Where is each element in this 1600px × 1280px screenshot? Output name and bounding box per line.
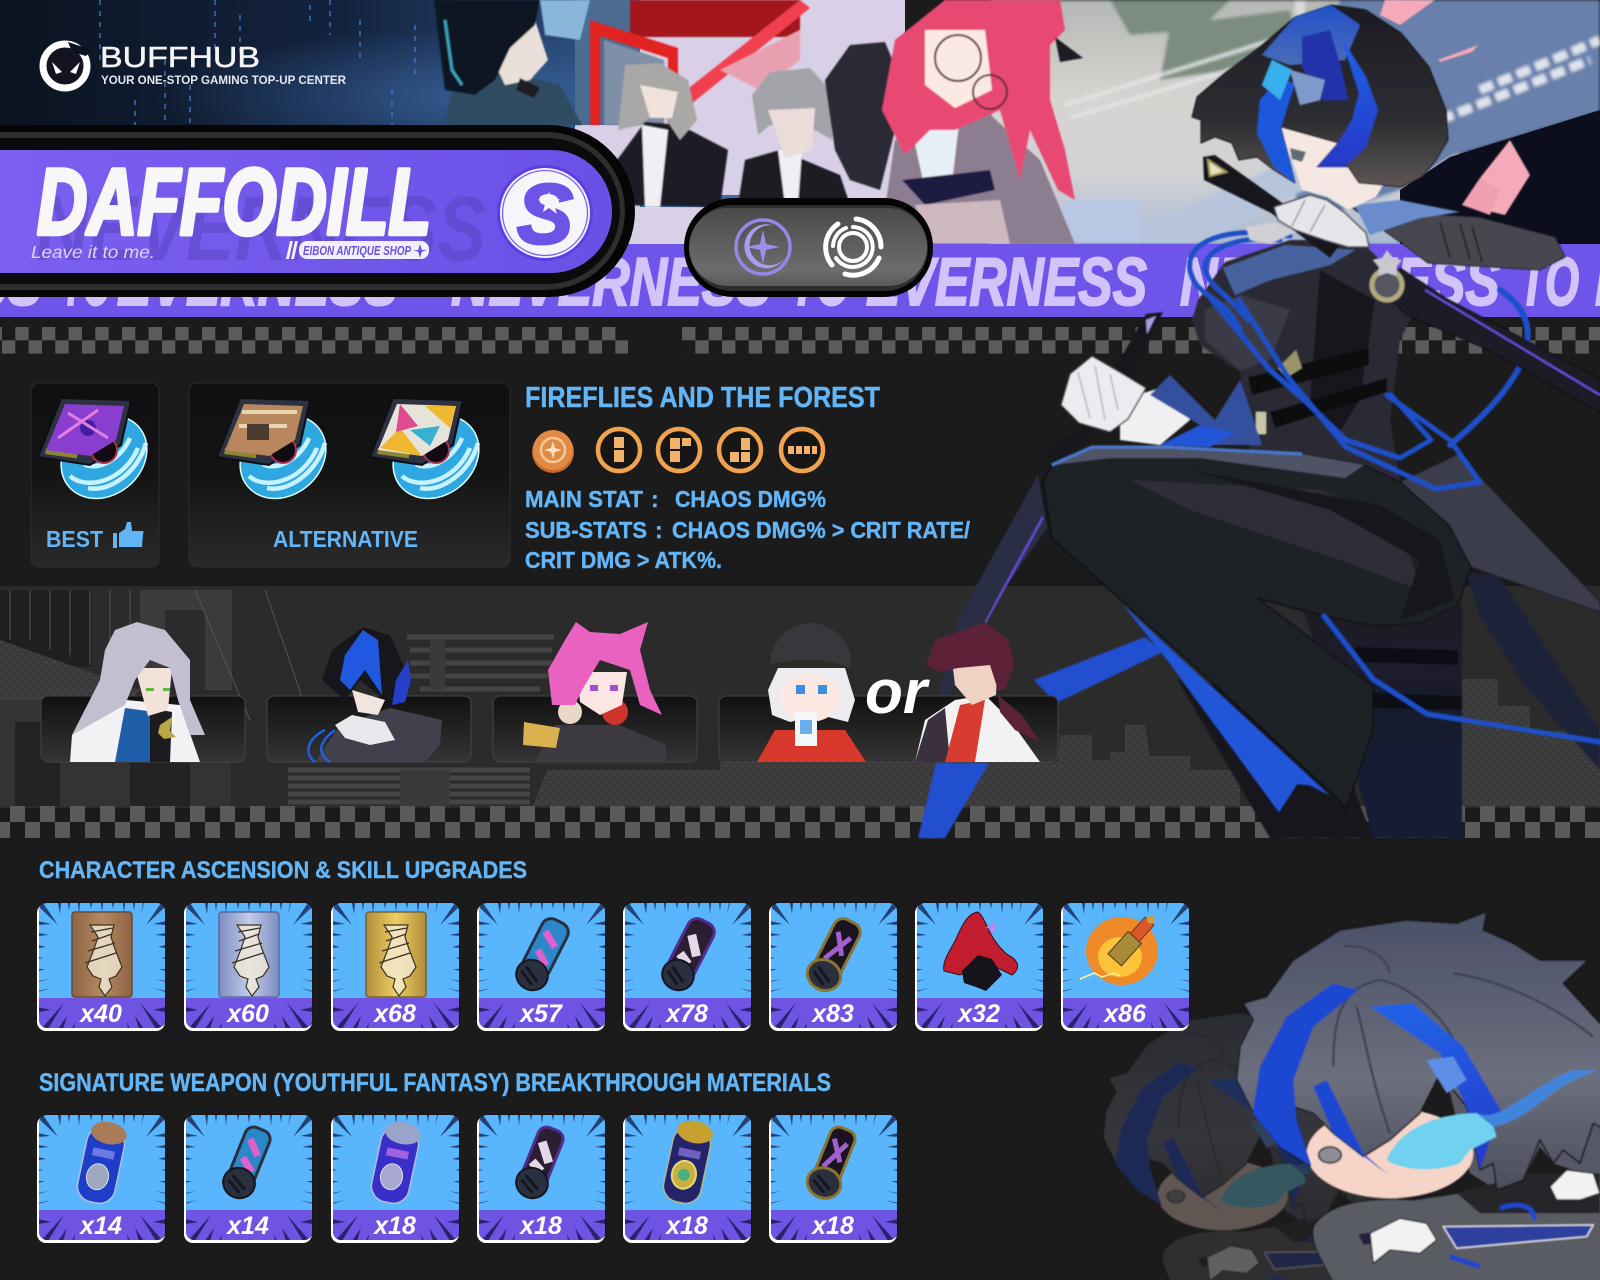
city silhouette — [640, 175, 760, 207]
icon: spark plug — [1080, 911, 1160, 985]
icon: imaginary element — [736, 220, 790, 274]
gloved hand — [1061, 356, 1146, 432]
ghost word: NEVERNESS — [36, 178, 486, 280]
sheath lower — [938, 475, 1047, 696]
scrolling banner strip: EVERNESS — [866, 244, 1147, 320]
panel: team cards — [41, 622, 1058, 762]
boy with dark hair — [434, 0, 590, 125]
chibi ghost echo — [1103, 1007, 1413, 1280]
tile x40: x40 — [78, 1000, 122, 1028]
icon: alternative relic one — [217, 398, 343, 516]
dark lower hem — [1177, 679, 1373, 838]
icon: blue tube — [219, 1123, 276, 1203]
icon: red cape — [944, 912, 1018, 991]
blue ropes — [1190, 232, 1600, 742]
petals — [1380, 0, 1530, 215]
tile x14 tube — [184, 1114, 313, 1243]
dark shaded corner — [1400, 110, 1600, 244]
icon: gold tube — [802, 914, 866, 996]
right coat flap — [1400, 454, 1600, 612]
tile x57 — [477, 902, 606, 1031]
heading: weapon materials: SIGNATURE WEAPON (YOUTHFUL FANTASY) BREAKTHROUGH MATERIALS — [39, 1069, 831, 1097]
white cuff and blue sleeve — [1120, 375, 1262, 447]
sub stats: : — [655, 517, 663, 543]
main stat — [525, 486, 826, 512]
icon: thumbs up — [113, 522, 144, 548]
tile x60: x60 — [225, 1000, 269, 1028]
tile x40 — [37, 902, 166, 1031]
tile x83: x83 — [810, 1000, 854, 1028]
hanging tail — [1467, 574, 1600, 770]
night sky with data rain — [0, 0, 620, 130]
faction tag: EIBON ANTIQUE SHOP — [303, 244, 412, 258]
tile x18 silver capsule — [331, 1114, 460, 1243]
tile x86: x86 — [1102, 1000, 1147, 1028]
icon: silver capsule — [368, 1118, 423, 1206]
sleeve — [1351, 200, 1565, 270]
name title: DAFFODILL — [37, 149, 431, 254]
icon: path symbol — [826, 219, 881, 275]
tile x32: x32 — [956, 1000, 1000, 1028]
tile x60 — [184, 902, 313, 1031]
icon: slot feet — [781, 429, 823, 471]
heading: ascension materials: CHARACTER ASCENSION & SKILL UPGRADES — [39, 857, 527, 884]
tile x18 gold tube — [769, 1114, 898, 1243]
scrolling banner strip: TO — [61, 244, 111, 320]
tile x86 — [1061, 902, 1190, 1031]
icon: silver card — [219, 912, 279, 997]
path emblem — [497, 165, 593, 261]
path emblem: S — [517, 167, 573, 261]
pink haired girl — [825, 0, 1083, 244]
logo icon — [43, 42, 92, 88]
sub stats: SUB-STATS — [525, 517, 647, 543]
icon: gold card — [366, 912, 426, 997]
tile x83 — [769, 902, 898, 1031]
chibi main — [1237, 912, 1600, 1280]
scrolling banner strip: NEVERNESS — [451, 244, 771, 320]
tile x32 — [915, 902, 1044, 1031]
maroon haired man — [915, 622, 1040, 762]
icon: purple tube — [657, 914, 719, 996]
bottom checker strip — [0, 806, 1600, 838]
icon: gold tube — [803, 1123, 861, 1203]
panel: alternative relics — [189, 383, 510, 567]
main character art — [918, 0, 1600, 838]
sub stats — [525, 517, 971, 543]
icon: slot head — [598, 429, 640, 471]
street background — [990, 0, 1600, 245]
top checker strip — [0, 327, 1600, 354]
tile x78: x78 — [664, 1000, 708, 1028]
scrolling banner strip: NEVERNESS — [1180, 244, 1500, 320]
upper gloved hand — [1246, 195, 1369, 247]
or text: or — [865, 658, 930, 727]
character band with city backdrop — [0, 586, 1600, 808]
main stat: MAIN STAT — [525, 486, 643, 512]
hair — [1192, 5, 1448, 187]
quote: Leave it to me. — [31, 242, 155, 262]
torso — [1192, 240, 1420, 482]
icon: set coin — [532, 430, 574, 473]
best label: BEST — [46, 526, 103, 552]
tile x78 — [623, 902, 752, 1031]
lower leg — [1302, 605, 1462, 838]
icon: bronze card — [72, 912, 132, 997]
sword hilt — [1203, 155, 1340, 258]
tile x68: x68 — [372, 1000, 416, 1028]
main stat: CHAOS DMG% — [675, 486, 826, 512]
tile x14 capsule: x14 — [78, 1212, 122, 1240]
crit line: CRIT DMG > ATK%. — [525, 547, 722, 573]
icon: slot body — [719, 429, 761, 471]
logo wordmark: BUFFHUB — [100, 42, 260, 74]
tile x18 silver capsule: x18 — [372, 1212, 416, 1240]
icon: gold capsule — [660, 1117, 715, 1206]
tile x18 purple tube: x18 — [518, 1212, 562, 1240]
blue ribbons — [918, 637, 1163, 838]
alternative label: ALTERNATIVE — [273, 526, 418, 552]
panel: best relic — [31, 383, 164, 567]
silver haired girl — [615, 63, 728, 207]
header collage scene — [0, 0, 1600, 245]
red gate — [590, 0, 810, 125]
icon: slot hands — [658, 429, 700, 471]
tile x57: x57 — [518, 1000, 563, 1028]
icon: purple tube — [512, 1123, 569, 1203]
set name: FIREFLIES AND THE FOREST — [525, 382, 880, 414]
face — [1281, 127, 1383, 210]
logo — [43, 42, 347, 88]
card: pink haired support — [493, 622, 697, 762]
icon: best relic — [38, 398, 164, 516]
blue skirt lining — [1123, 605, 1329, 812]
tile x14 capsule — [37, 1114, 166, 1243]
logo tagline: YOUR ONE-STOP GAMING TOP-UP CENTER — [101, 75, 347, 87]
relic set details — [525, 382, 971, 573]
icon: blue tube — [511, 914, 573, 996]
card: silver haired support — [41, 622, 245, 762]
card: daffodill — [267, 627, 471, 762]
icon: alternative relic two — [370, 398, 496, 516]
faction tag — [286, 241, 429, 259]
tile x14 tube: x14 — [225, 1212, 269, 1240]
element and path pill — [684, 198, 933, 297]
card: white haired or maroon haired healer — [719, 622, 1058, 762]
chibi portrait — [1103, 912, 1600, 1280]
tile x18 gold capsule: x18 — [664, 1212, 708, 1240]
tile x18 gold capsule — [623, 1114, 752, 1243]
scrolling banner strip — [0, 244, 1600, 320]
light backdrop behind anime characters — [575, 0, 905, 245]
sword blade and guard — [1372, 250, 1600, 412]
white haired girl — [757, 623, 866, 762]
tile x18 purple tube — [477, 1114, 606, 1243]
scrolling banner strip: TO — [790, 244, 850, 320]
main stat: : — [651, 486, 659, 512]
name capsule — [0, 125, 635, 297]
scrolling banner strip: EVERNESS — [117, 244, 398, 320]
big thigh and coat — [1043, 447, 1471, 809]
silver haired boy — [738, 68, 850, 205]
sheath upper — [1045, 312, 1163, 470]
icon: bronze capsule — [74, 1118, 129, 1206]
tile x18 gold tube: x18 — [810, 1212, 854, 1240]
sub stats: CHAOS DMG% > CRIT RATE/ — [672, 517, 971, 543]
tile x68 — [331, 902, 460, 1031]
